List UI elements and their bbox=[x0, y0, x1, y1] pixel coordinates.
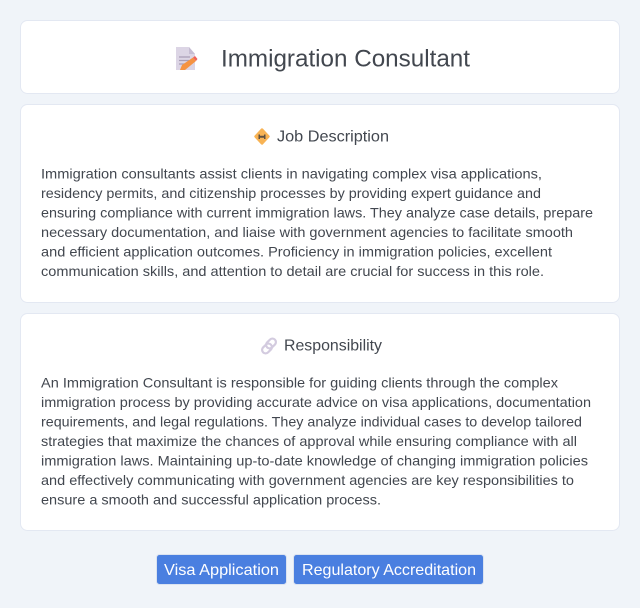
text block: responsibility: ensure a smooth and successful application process. bbox=[41, 492, 381, 508]
text block: job description: necessary documentation, and liaise with government agencies to facilitate smooth bbox=[41, 224, 573, 240]
tag: regulatory accreditation: Regulatory Accreditation bbox=[302, 562, 476, 579]
text block: job description bbox=[41, 166, 593, 279]
panel: responsibility bbox=[20, 314, 620, 530]
text block: responsibility: strategies that maximize the chances of approval while ensuring compliance with all bbox=[41, 433, 577, 449]
title: Immigration Consultant bbox=[221, 46, 470, 72]
tag: visa application bbox=[156, 554, 286, 584]
text block: responsibility: immigration laws. Maintaining up-to-date knowledge of changing immigration policies bbox=[41, 452, 588, 468]
text block: job description: and efficient application outcomes. Proficiency in immigration policies, excellent bbox=[41, 244, 552, 260]
panel: title card bbox=[20, 20, 620, 94]
text block: responsibility: An Immigration Consultant is responsible for guiding clients through the complex bbox=[41, 374, 558, 390]
tag: regulatory accreditation bbox=[294, 554, 484, 584]
heading: responsibility: Responsibility bbox=[284, 338, 382, 354]
icon: chain link bbox=[261, 337, 277, 355]
icon: construction diamond bbox=[256, 130, 268, 144]
text block: responsibility bbox=[41, 374, 591, 508]
text block: responsibility: and effectively communicating with government agencies are key responsibilities to bbox=[41, 472, 574, 488]
text block: responsibility: requirements, and legal regulations. They analyze individual cases to develop tailored bbox=[41, 414, 582, 430]
text block: responsibility: immigration process by providing accurate advice on visa applications, documentation bbox=[41, 394, 591, 410]
text block: job description: Immigration consultants assist clients in navigating complex visa applications, bbox=[41, 166, 542, 182]
text block: job description: residency permits, and citizenship processes by providing expert guidance and bbox=[41, 185, 541, 201]
panel: job description bbox=[20, 104, 620, 302]
heading: job description: Job Description bbox=[277, 128, 389, 146]
tag: visa application: Visa Application bbox=[164, 562, 279, 579]
text block: job description: communication skills, and attention to detail are crucial for success in this role. bbox=[41, 263, 544, 279]
text block: job description: ensuring compliance with current immigration laws. They analyze case details, prepare bbox=[41, 204, 593, 220]
icon: document with pencil bbox=[176, 47, 198, 70]
